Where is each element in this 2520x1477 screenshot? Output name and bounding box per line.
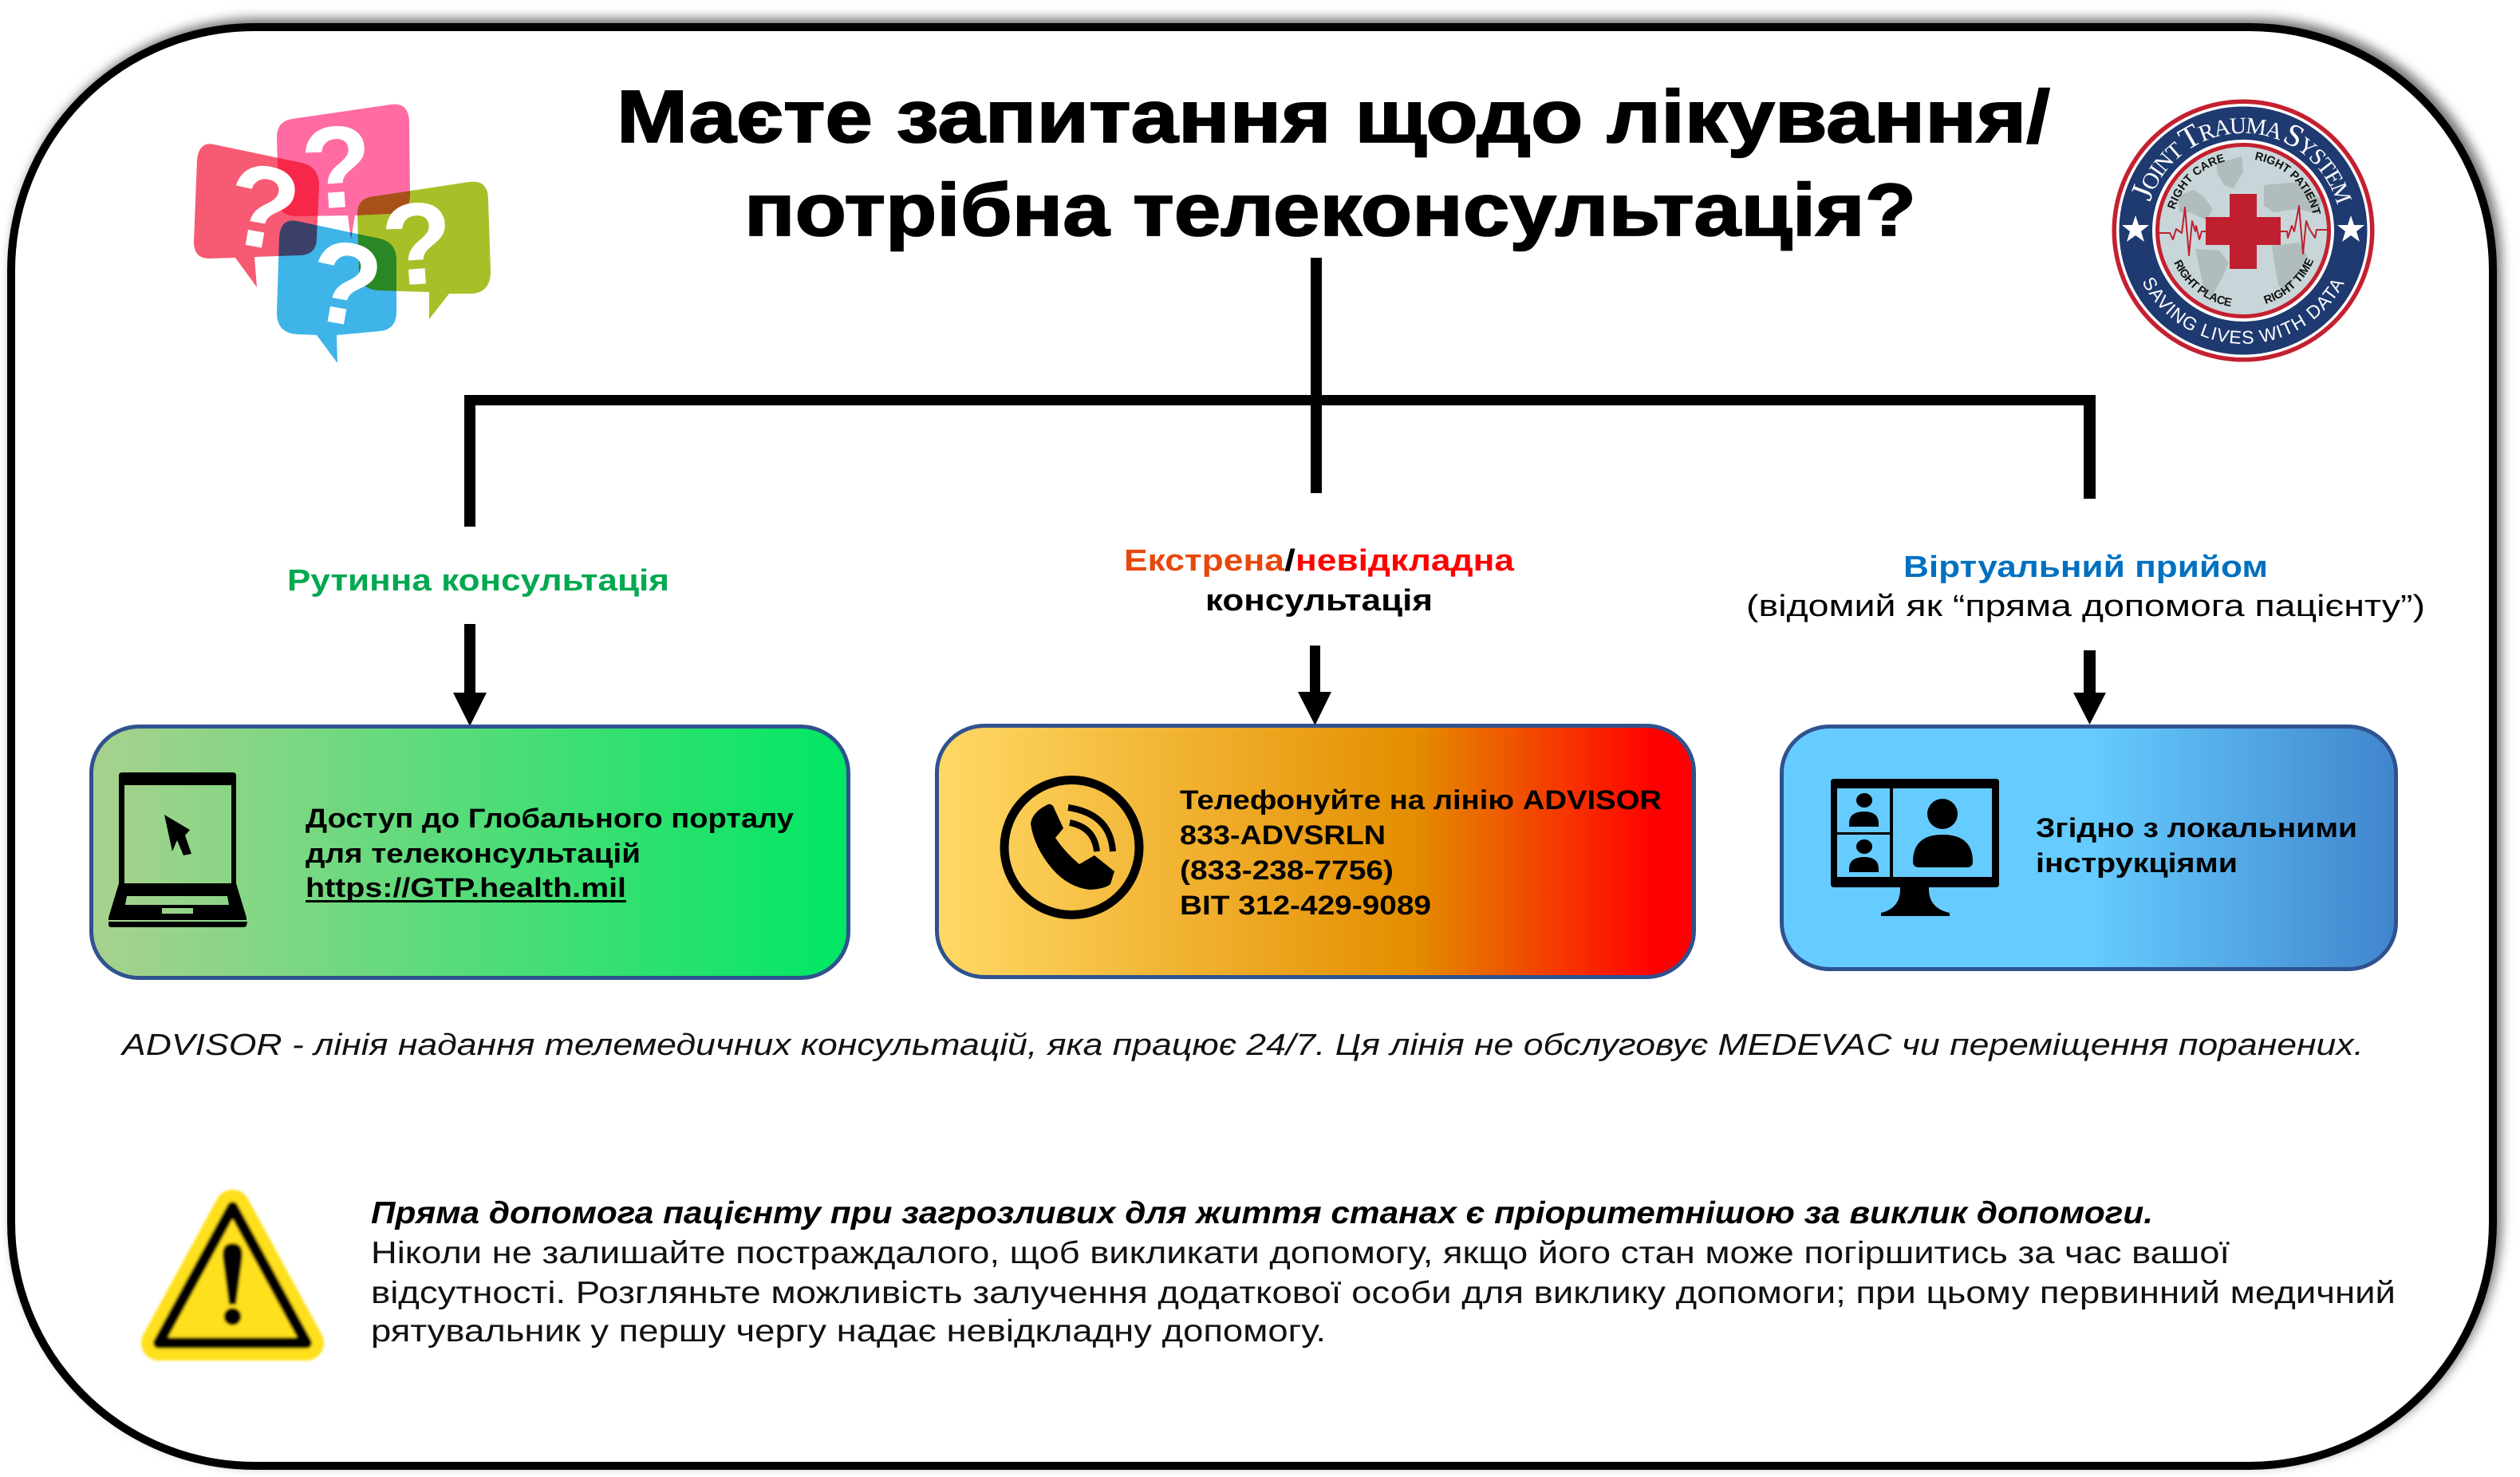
seal text: JOINT TRAUMA SYSTEM	[2132, 118, 2352, 205]
logo: Joint Trauma System seal	[2112, 99, 2374, 362]
text: local guidelines: інструкціями	[2036, 848, 2238, 879]
arrow: routine	[453, 624, 487, 726]
label: urgent consultation: консультація	[1205, 584, 1433, 618]
world map	[2178, 156, 2321, 297]
text: portal: Доступ до Глобального порталу	[306, 804, 794, 834]
ecg lines	[2159, 206, 2327, 255]
question marks: ?	[297, 100, 377, 235]
text: advisor line: (833-238-7756)	[1180, 855, 1394, 886]
warning text: Пряма допомога пацієнту при загрозливих для життя станах є пріоритетнішою за виклик допомоги.	[371, 1196, 2153, 1230]
question marks	[216, 100, 457, 353]
label: virtual visit	[1746, 551, 2425, 623]
icon: video call monitor	[1831, 779, 1999, 916]
text: portal	[306, 804, 794, 903]
title: потрібна телеконсультація?	[744, 168, 1916, 251]
label: virtual visit: (відомий як “пряма допомога пацієнту”)	[1746, 590, 2425, 623]
label: urgent consultation	[1124, 544, 1515, 618]
text: local guidelines: Згідно з локальними	[2036, 813, 2357, 843]
bubble: green	[357, 182, 491, 319]
title	[617, 75, 2050, 251]
arrow: virtual	[2073, 650, 2106, 725]
red cross	[2206, 194, 2281, 269]
title: Маєте запитання щодо лікування/	[617, 75, 2050, 158]
footnote: ADVISOR - лінія надання телемедичних консультацій, яка працює 24/7. Ця лінія не обслуговує MEDEVAC чи переміщення поранених.	[120, 1029, 2364, 1062]
bubble: red	[194, 144, 319, 287]
warning text	[371, 1196, 2396, 1349]
panel: routine	[91, 726, 849, 978]
bubble: blue	[277, 220, 396, 363]
logo: Joint Trauma System seal: RIGHT PATIENT	[2255, 152, 2321, 214]
arrow: urgent	[1298, 646, 1331, 725]
bubble: pink	[277, 105, 410, 239]
logo: Joint Trauma System seal: RIGHT TIME	[2264, 257, 2313, 304]
label: urgent consultation: невідкладна	[1295, 544, 1515, 578]
logo: Joint Trauma System seal: RIGHT PLACE	[2174, 259, 2232, 306]
question marks: ?	[216, 136, 310, 277]
label: urgent consultation: Екстрена	[1124, 544, 1285, 578]
label: urgent consultation: /	[1284, 544, 1296, 578]
text: local guidelines	[2036, 813, 2357, 879]
stars	[2122, 215, 2364, 242]
panel: urgent	[937, 726, 1694, 977]
text: portal: https://GTP.health.mil	[306, 873, 626, 903]
panel: virtual	[1782, 726, 2396, 969]
icon: phone	[1004, 780, 1139, 914]
connector: title to branches	[464, 258, 2096, 527]
warning text: Ніколи не залишайте постраждалого, щоб викликати допомогу, якщо його стан може погіршитись за час вашої	[371, 1236, 2230, 1270]
icon: laptop	[108, 772, 247, 927]
text: advisor line: Телефонуйте на лінію ADVISOR	[1180, 785, 1662, 816]
question marks: ?	[298, 213, 392, 353]
icon: question speech bubbles	[194, 100, 491, 363]
text: portal: для телеконсультацій	[306, 839, 641, 869]
logo: Joint Trauma System seal: RIGHT CARE	[2167, 153, 2225, 209]
text: advisor line: BIT 312-429-9089	[1180, 891, 1431, 921]
label: routine consultation: Рутинна консультація	[287, 564, 669, 598]
text: advisor line	[1180, 785, 1662, 921]
label: virtual visit: Віртуальний прийом	[1903, 551, 2268, 584]
text: advisor line: 833-ADVSRLN	[1180, 820, 1386, 851]
warning text: відсутності. Розгляньте можливість залучення додаткової особи для виклику допомоги; при цьому первинний медичний	[371, 1276, 2396, 1310]
icon: warning triangle	[159, 1207, 306, 1343]
question marks: ?	[377, 176, 457, 311]
warning text: рятувальник у першу чергу надає невідкладну допомогу.	[371, 1314, 1326, 1349]
logo: Joint Trauma System seal: SAVING LIVES WITH DATA	[2143, 278, 2345, 344]
